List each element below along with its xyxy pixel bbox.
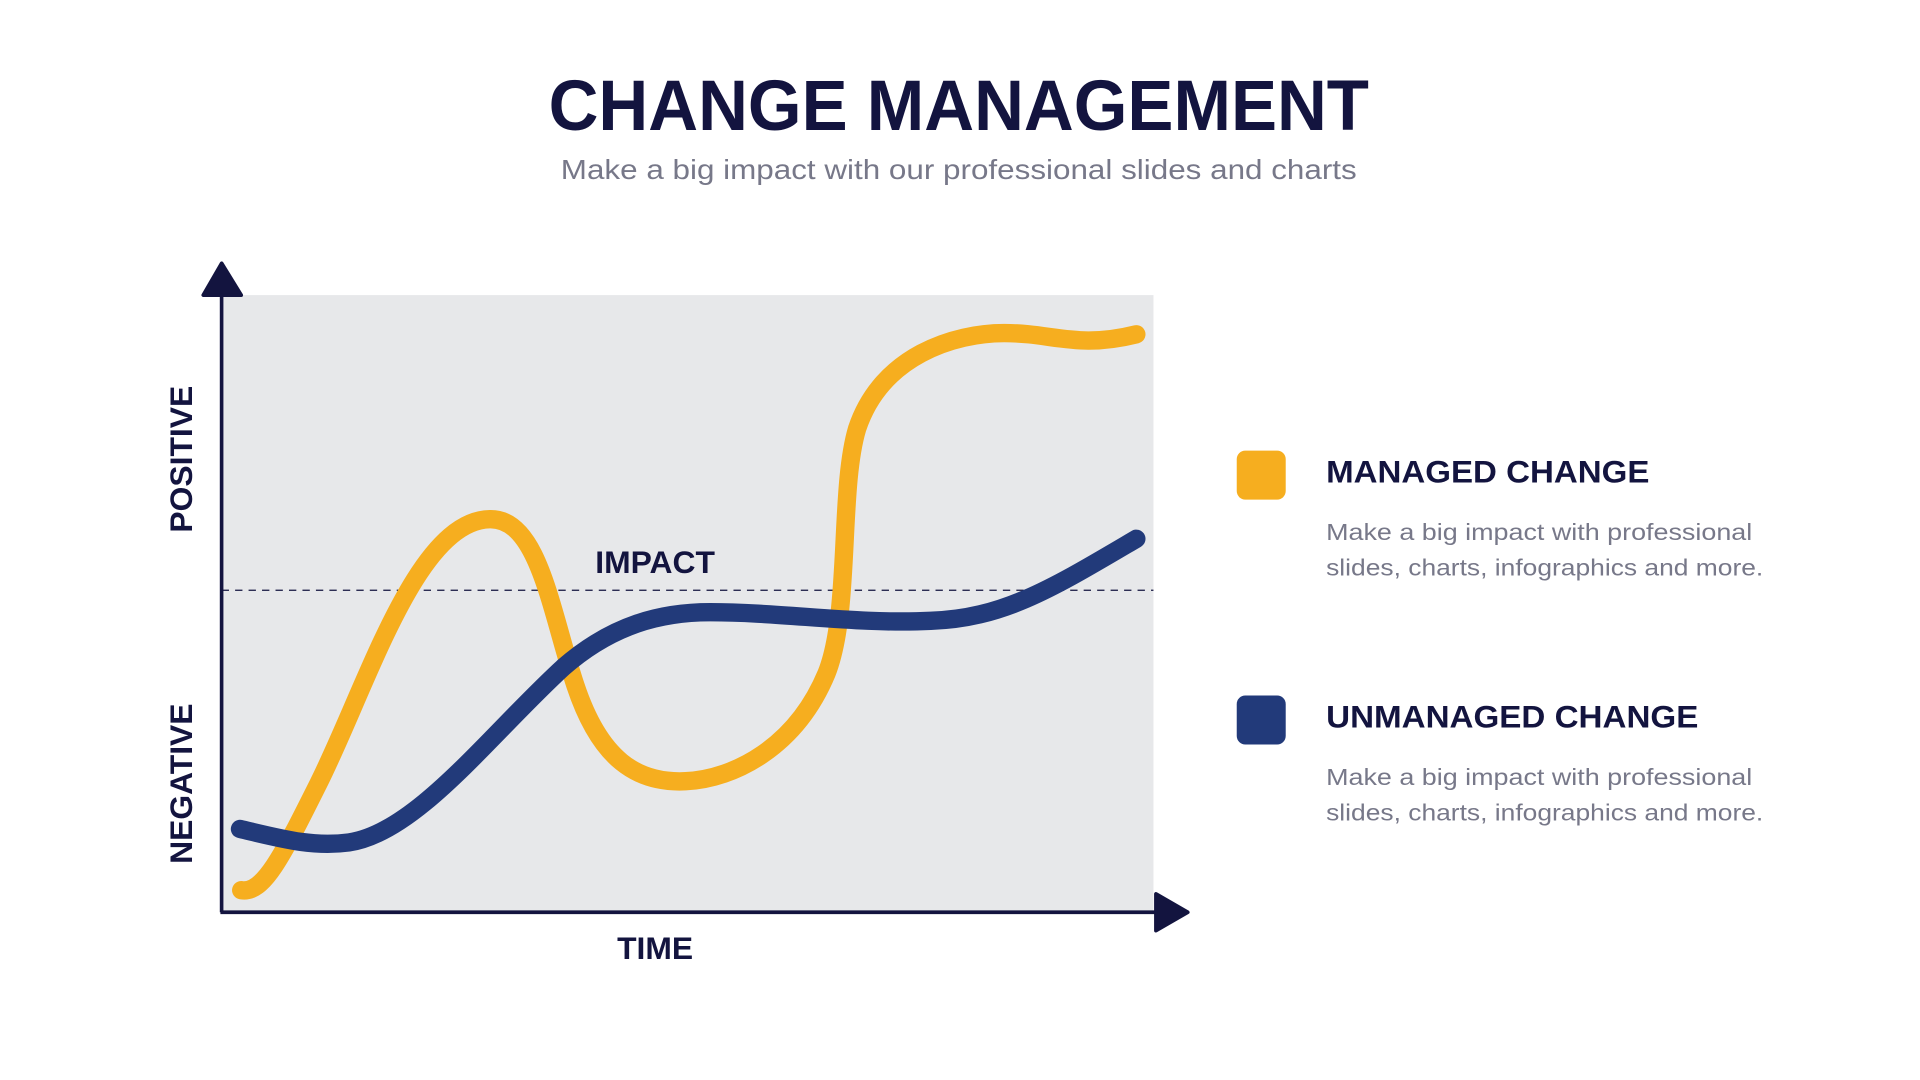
curve: managed change [241,333,1136,890]
subtitle: Make a big impact with our professional slides and charts [561,154,1357,185]
label: negative: NEGATIVE [163,704,199,864]
label: time: TIME [617,930,693,966]
chart [163,263,1188,966]
title: CHANGE MANAGEMENT [549,67,1369,146]
legend: unmanaged change [1237,696,1763,825]
legend: managed change: Make a big impact with professional [1326,519,1752,545]
legend: managed change: MANAGED CHANGE [1326,453,1649,489]
legend: managed change [1237,451,1763,581]
y axis arrow [203,263,241,912]
icon: blue square [1237,696,1286,744]
label: positive: POSITIVE [163,386,199,533]
legend: unmanaged change: Make a big impact with professional [1326,764,1752,790]
x axis arrow [220,894,1188,931]
icon: yellow square [1237,451,1286,500]
legend: unmanaged change: slides, charts, infographics and more. [1326,799,1763,825]
label: impact: IMPACT [595,544,715,580]
curve: unmanaged change [240,539,1136,844]
legend: managed change: slides, charts, infographics and more. [1326,555,1763,581]
chart background [224,295,1153,912]
legend: unmanaged change: UNMANAGED CHANGE [1326,698,1698,734]
